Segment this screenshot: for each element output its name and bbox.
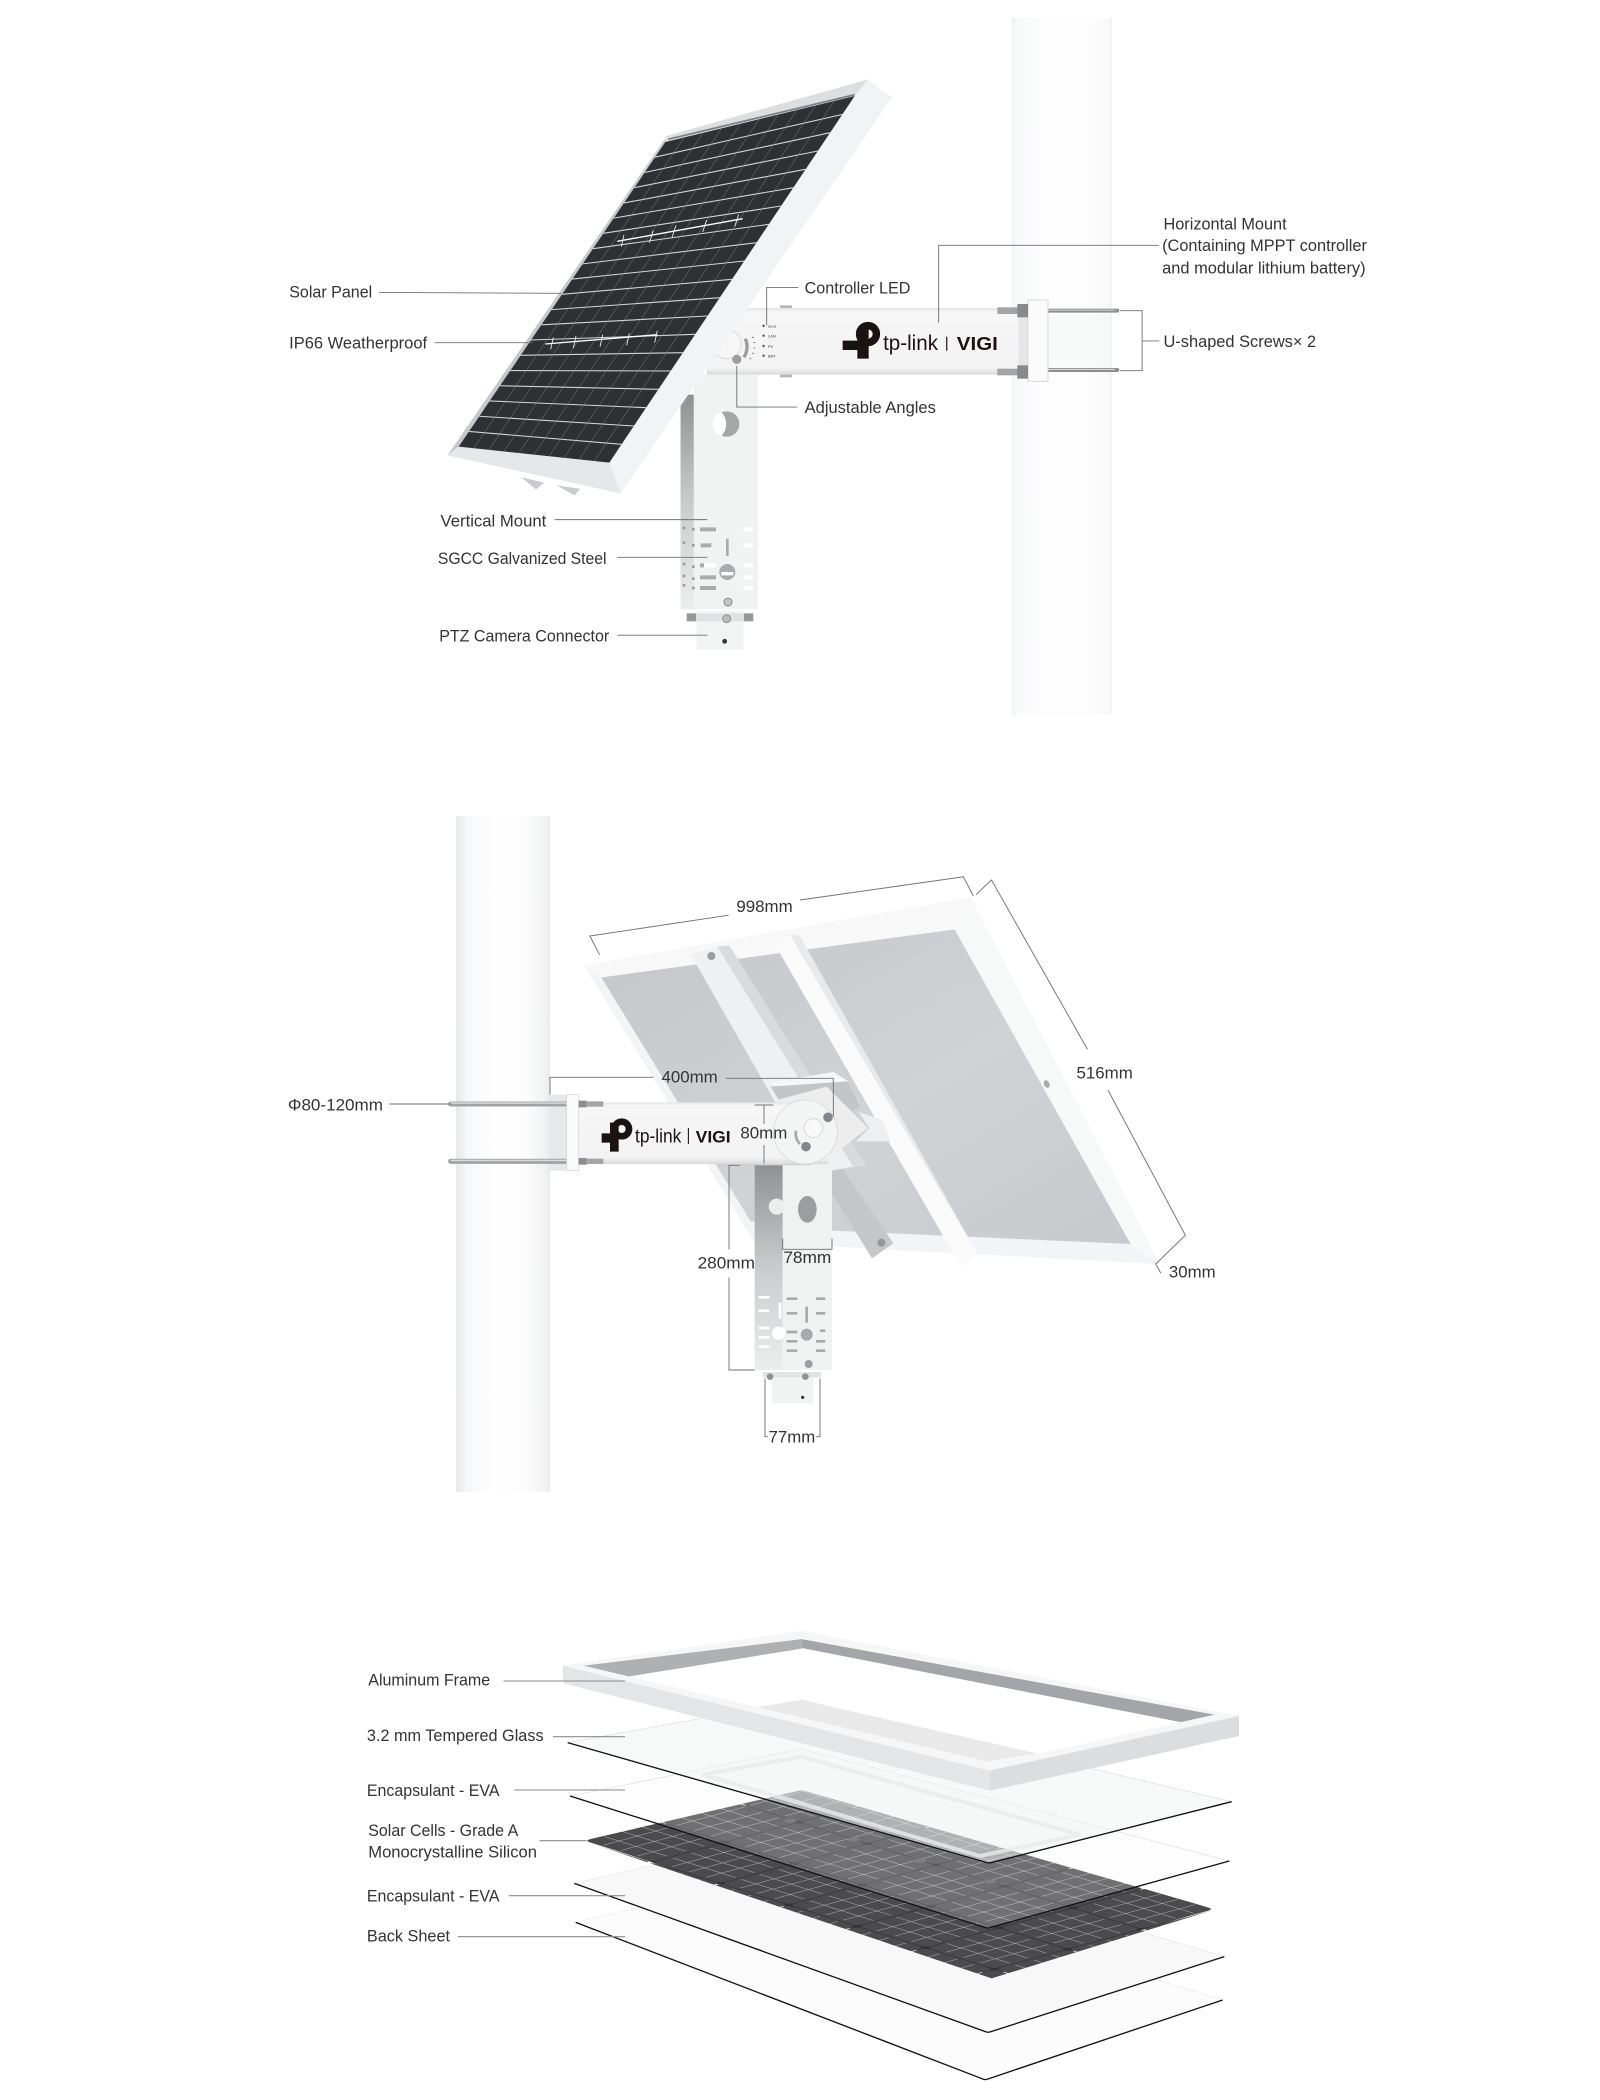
logo: tp-link VIGI: tp-link bbox=[883, 331, 938, 355]
dimension: 998mm bbox=[590, 877, 973, 955]
label: Solar Panel: Solar Panel bbox=[289, 284, 372, 302]
controller LED indicators: BAT bbox=[768, 354, 776, 359]
label: U-shaped Screws: U-shaped Screws× 2 bbox=[1163, 333, 1316, 351]
layer: aluminum frame bbox=[563, 1631, 1239, 1791]
dimension: 78mm: 78mm bbox=[783, 1249, 831, 1267]
layer: EVA lower bbox=[574, 1831, 1224, 2033]
label: Adjustable Angles: Adjustable Angles bbox=[805, 399, 936, 417]
back sheet edge bbox=[576, 1922, 1223, 2080]
label: Vertical Mount: Vertical Mount bbox=[441, 513, 547, 531]
lower mounting rail bbox=[832, 1153, 893, 1258]
label: Encapsulant - EVA upper: Encapsulant - EVA bbox=[367, 1782, 500, 1800]
dimension: 80mm bbox=[740, 1105, 787, 1163]
upper EVA edge bbox=[570, 1796, 1229, 1928]
logo: tp-link VIGI rear bbox=[602, 1122, 731, 1152]
logo: tp-link VIGI bbox=[843, 326, 998, 359]
label: Solar Cells bbox=[368, 1822, 587, 1861]
section: exploded panel layers bbox=[367, 1631, 1239, 2080]
controller LED indicators bbox=[762, 324, 776, 359]
dimension: 516mm: 516mm bbox=[1077, 1064, 1133, 1082]
rear rail long bbox=[775, 935, 977, 1267]
label: Horizontal Mount: and modular lithium battery) bbox=[1162, 259, 1366, 277]
vertical mount bbox=[681, 375, 758, 609]
layer: tempered glass bbox=[568, 1700, 1232, 1863]
label: Controller LED bbox=[767, 280, 910, 325]
panel light glints bbox=[545, 219, 743, 344]
logo: tp-link VIGI: VIGI bbox=[957, 333, 998, 354]
dimension: 400mm bbox=[550, 1068, 833, 1117]
panel cell rows bbox=[469, 114, 842, 444]
layer: back sheet bbox=[576, 1869, 1223, 2080]
label: Controller LED: Controller LED bbox=[805, 280, 910, 298]
horizontal mount arm bbox=[707, 305, 1019, 377]
layer: EVA upper bbox=[570, 1749, 1229, 1928]
layer: solar cells bbox=[583, 1790, 1215, 1978]
label: 3.2 mm Tempered Glass: 3.2 mm Tempered Glass bbox=[367, 1727, 544, 1745]
logo: tp-link VIGI rear: VIGI bbox=[696, 1128, 731, 1147]
solar panel rear bbox=[584, 897, 1160, 1267]
label: SGCC Galvanized Steel: SGCC Galvanized Steel bbox=[438, 550, 607, 568]
label: PTZ Camera Connector: PTZ Camera Connector bbox=[439, 628, 610, 646]
label: Adjustable Angles bbox=[737, 366, 936, 417]
lower EVA edge bbox=[574, 1883, 1224, 2032]
glass highlight strip bbox=[757, 1700, 1037, 1763]
dimension: 77mm bbox=[765, 1378, 820, 1446]
dimension: 30mm: 30mm bbox=[1169, 1264, 1216, 1282]
controller LED indicators: PV bbox=[768, 344, 774, 349]
dimension: 280mm: 280mm bbox=[698, 1254, 755, 1272]
dimension: 516mm bbox=[976, 880, 1185, 1250]
label: U-shaped Screws bbox=[1120, 311, 1316, 371]
dimension: pole diameter: Φ80-120mm bbox=[288, 1096, 383, 1114]
logo: tp-link VIGI rear: tp-link bbox=[635, 1127, 682, 1148]
controller LED indicators: SYS bbox=[768, 324, 776, 329]
panel cell columns bbox=[474, 101, 835, 461]
label: Aluminum Frame: Aluminum Frame bbox=[368, 1671, 490, 1689]
dimension: 30mm bbox=[1156, 1250, 1216, 1282]
label: Solar Cells: Solar Cells - Grade A bbox=[368, 1822, 518, 1840]
label: Horizontal Mount: Horizontal Mount bbox=[1163, 215, 1287, 233]
pole bbox=[456, 816, 550, 1492]
vertical mount rear bbox=[755, 1165, 832, 1370]
pole clamp rear bbox=[451, 1095, 603, 1171]
section: front view of solar mount bbox=[289, 18, 1368, 715]
dimension: 400mm: 400mm bbox=[661, 1068, 718, 1086]
dimension: 998mm: 998mm bbox=[736, 898, 793, 916]
camera connector rear bbox=[763, 1372, 821, 1403]
dimension: 280mm bbox=[698, 1165, 755, 1370]
label: Horizontal Mount: (Containing MPPT controller bbox=[1162, 237, 1368, 255]
glass edge bbox=[568, 1743, 1232, 1863]
label: Horizontal Mount bbox=[939, 215, 1368, 323]
pole bbox=[1012, 18, 1112, 715]
PTZ camera connector bbox=[687, 611, 753, 649]
pole clamp and U-shaped screws bbox=[997, 300, 1117, 381]
label: IP66 Weatherproof: IP66 Weatherproof bbox=[289, 335, 428, 353]
bracket and rotating joint bbox=[769, 1072, 891, 1165]
solar panel front bbox=[447, 79, 892, 495]
label: Back Sheet: Back Sheet bbox=[367, 1928, 450, 1946]
dimension: 77mm: 77mm bbox=[769, 1428, 815, 1446]
section: rear view with dimensions bbox=[288, 816, 1216, 1492]
label: Solar Cells: Monocrystalline Silicon bbox=[368, 1843, 537, 1861]
dimension: 78mm bbox=[783, 1239, 832, 1267]
label: Encapsulant - EVA lower: Encapsulant - EVA bbox=[367, 1888, 500, 1906]
dimension: 80mm: 80mm bbox=[740, 1125, 787, 1143]
horizontal arm rear bbox=[579, 1100, 837, 1164]
controller LED indicators: LAN bbox=[768, 334, 776, 339]
upper EVA inner border bbox=[703, 1757, 1080, 1856]
rear rail short bbox=[691, 947, 853, 1173]
